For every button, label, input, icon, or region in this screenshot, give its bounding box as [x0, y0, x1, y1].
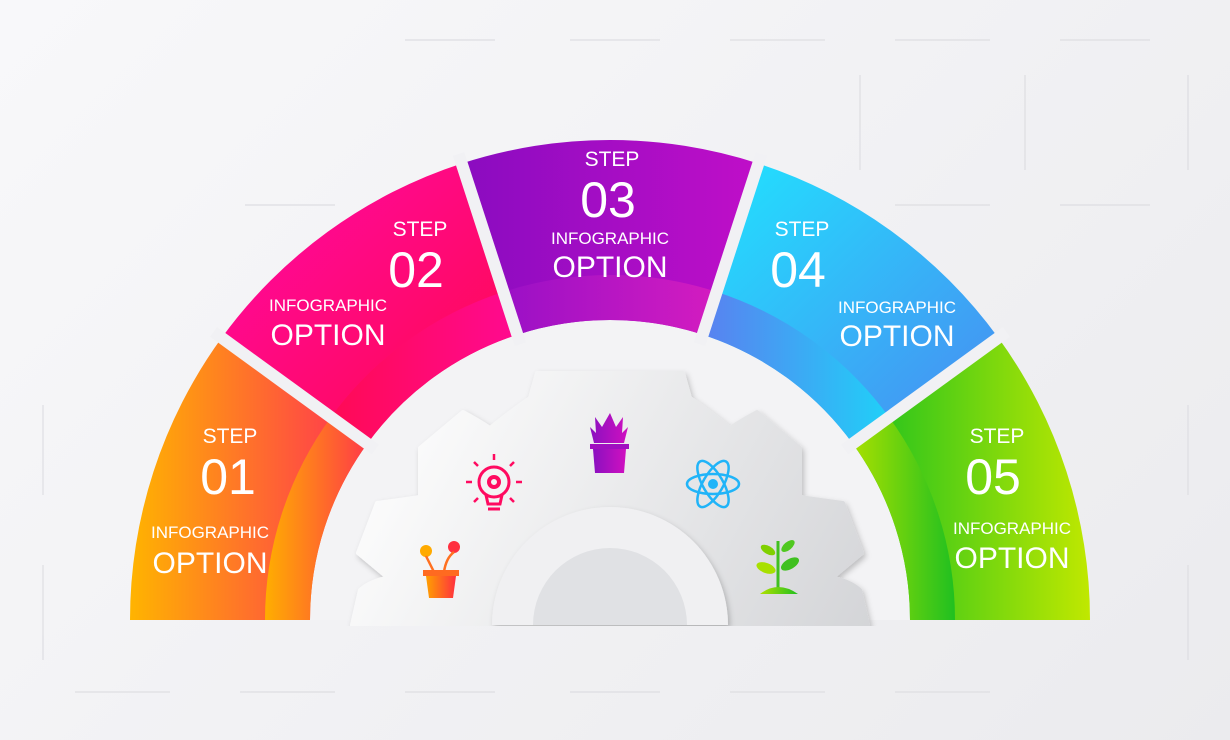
text: step 01: INFOGRAPHIC [151, 523, 269, 542]
text: step 05 [953, 425, 1071, 575]
text: step 05: OPTION [954, 542, 1070, 575]
text: step 05: STEP [970, 425, 1024, 448]
text: step 05: 05 [965, 449, 1021, 505]
text: step 02: STEP [393, 218, 447, 241]
text: step 01 [151, 425, 269, 580]
icon: succulent pot [590, 413, 629, 473]
icon: atom [687, 456, 739, 512]
segment 5 [853, 338, 1090, 620]
text: step 03: STEP [585, 148, 639, 171]
text: step 03: OPTION [552, 251, 668, 284]
segment 4 [703, 164, 998, 444]
text: step 03 [551, 148, 669, 284]
text: step 01: OPTION [152, 547, 268, 580]
text: step 01: 01 [200, 449, 256, 505]
text: step 04: INFOGRAPHIC [838, 298, 956, 317]
text: step 02: OPTION [270, 319, 386, 352]
text: step 04: 04 [770, 242, 826, 298]
text: step 02: INFOGRAPHIC [269, 296, 387, 315]
icon: flower pot [420, 541, 460, 598]
text: step 04: OPTION [839, 320, 955, 353]
segment 1 [130, 338, 367, 620]
segment 2 [222, 164, 517, 444]
icon: sprout [755, 538, 801, 594]
text: step 04 [770, 218, 956, 353]
text: step 05: INFOGRAPHIC [953, 519, 1071, 538]
text: step 03: INFOGRAPHIC [551, 229, 669, 248]
text: step 02 [269, 218, 447, 352]
icon: light bulb [466, 454, 522, 509]
text: step 04: STEP [775, 218, 829, 241]
gear [352, 373, 868, 625]
inner backdrop [310, 320, 910, 620]
text: step 02: 02 [388, 242, 444, 298]
text: step 01: STEP [203, 425, 257, 448]
segment 3 [462, 140, 758, 335]
text: step 03: 03 [580, 172, 636, 228]
